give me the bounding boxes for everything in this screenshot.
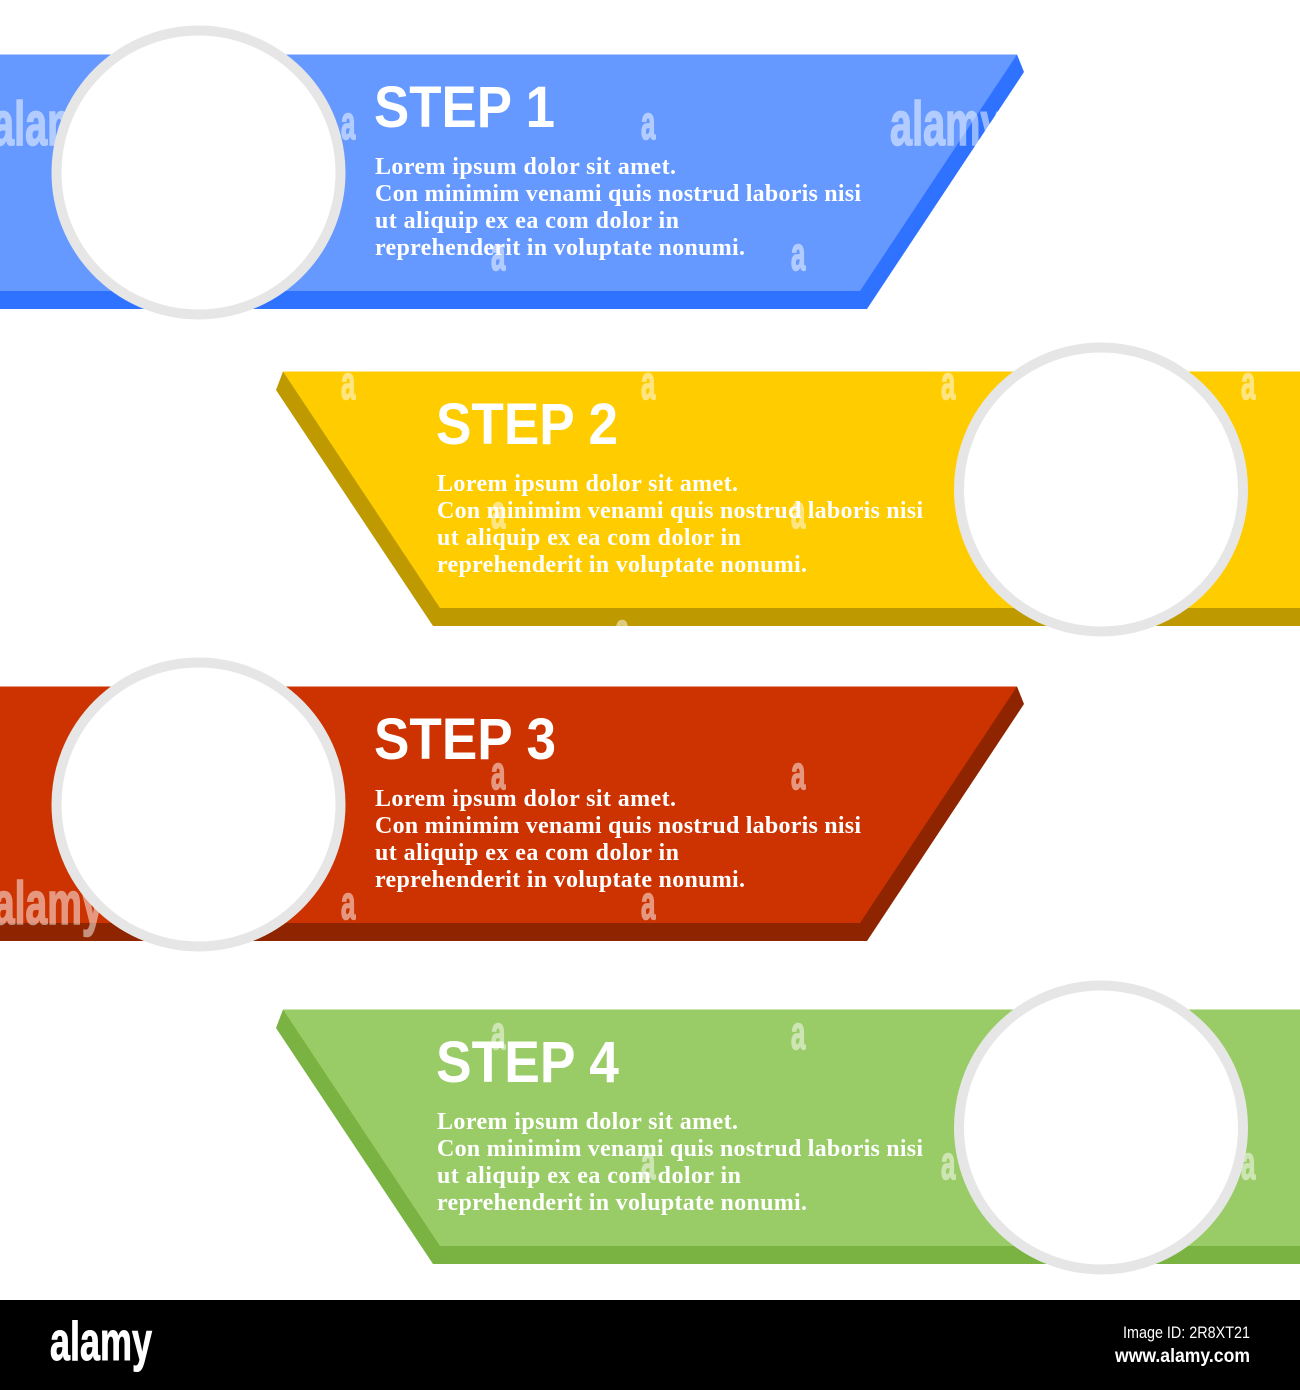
watermark: yellow banner: a [341,358,356,410]
panel: step 2 yellow banner [276,348,1300,657]
watermark: blue banner: alamy [890,90,1003,159]
watermark: blue banner: a [491,229,506,281]
watermark: red banner [0,748,806,937]
panel: step 1 blue banner [0,30,1024,314]
watermark: yellow banner: a [615,605,630,657]
text block: step 2 body: ut aliquip ex ea com dolor in [437,525,741,551]
watermark: red banner: a [791,748,806,800]
text block: step 4 body: reprehenderit in voluptate nonumi. [437,1190,807,1216]
footer url: www.alamy.com [1114,1346,1250,1367]
text block: step 2 body: Con minimim venami quis nostrud laboris nisi [437,498,923,524]
text block: step 2 body [437,471,923,578]
text block: step 1 body: Lorem ipsum dolor sit amet. [375,154,676,180]
text block: step 2 body: reprehenderit in voluptate nonumi. [437,552,807,578]
watermark: green banner: a [641,1138,656,1190]
text block: step 3 body: Con minimim venami quis nostrud laboris nisi [375,813,861,839]
text block: step 3 body [375,786,861,893]
footer bar [0,1300,1300,1390]
watermark: green banner: a [941,1138,956,1190]
watermark: blue banner: a [641,98,656,150]
watermark: yellow banner: a [491,487,506,539]
icon placeholder: step 1 circle [56,30,340,314]
icon placeholder: step 2 circle [959,348,1243,632]
text block: step 1 body: Con minimim venami quis nostrud laboris nisi [375,181,861,207]
watermark: yellow banner: a [791,487,806,539]
text block: step 3 body: reprehenderit in voluptate nonumi. [375,867,745,893]
panel: step 4 green banner [276,986,1300,1270]
watermark: yellow banner: a [641,358,656,410]
watermark: yellow banner: a [941,358,956,410]
watermark: green banner: a [491,1008,506,1060]
footer logo: alamy [50,1310,152,1372]
text block: step 3 body: Lorem ipsum dolor sit amet. [375,786,676,812]
watermark: blue banner [0,90,1003,281]
heading: step 2: STEP 2 [436,392,618,457]
icon placeholder: step 4 circle [959,986,1243,1270]
text block: step 4 body: Lorem ipsum dolor sit amet. [437,1109,738,1135]
text block: step 3 body: ut aliquip ex ea com dolor in [375,840,679,866]
text block: step 4 body [437,1109,923,1216]
watermark: red banner: a [641,878,656,930]
text block: step 4 body: Con minimim venami quis nostrud laboris nisi [437,1136,923,1162]
text block: step 1 body: ut aliquip ex ea com dolor in [375,208,679,234]
watermark: blue banner: a [341,98,356,150]
text block: step 1 body [375,154,861,261]
watermark: red banner: a [491,748,506,800]
watermark: green banner [491,1008,1256,1190]
watermark: green banner: a [1241,1138,1256,1190]
watermark: yellow banner [341,358,1256,657]
heading: step 3: STEP 3 [374,707,556,772]
text block: step 2 body: Lorem ipsum dolor sit amet. [437,471,738,497]
heading: step 4: STEP 4 [436,1030,619,1095]
watermark: blue banner: a [791,229,806,281]
footer image id: Image ID: 2R8XT21 [1123,1323,1250,1342]
icon placeholder: step 3 circle [56,662,340,946]
watermark: red banner: a [341,878,356,930]
watermark: yellow banner: a [1241,358,1256,410]
panel: step 3 red banner [0,662,1024,946]
text block: step 4 body: ut aliquip ex ea com dolor in [437,1163,741,1189]
watermark: green banner: a [791,1008,806,1060]
text block: step 1 body: reprehenderit in voluptate nonumi. [375,235,745,261]
heading: step 1: STEP 1 [374,75,555,140]
